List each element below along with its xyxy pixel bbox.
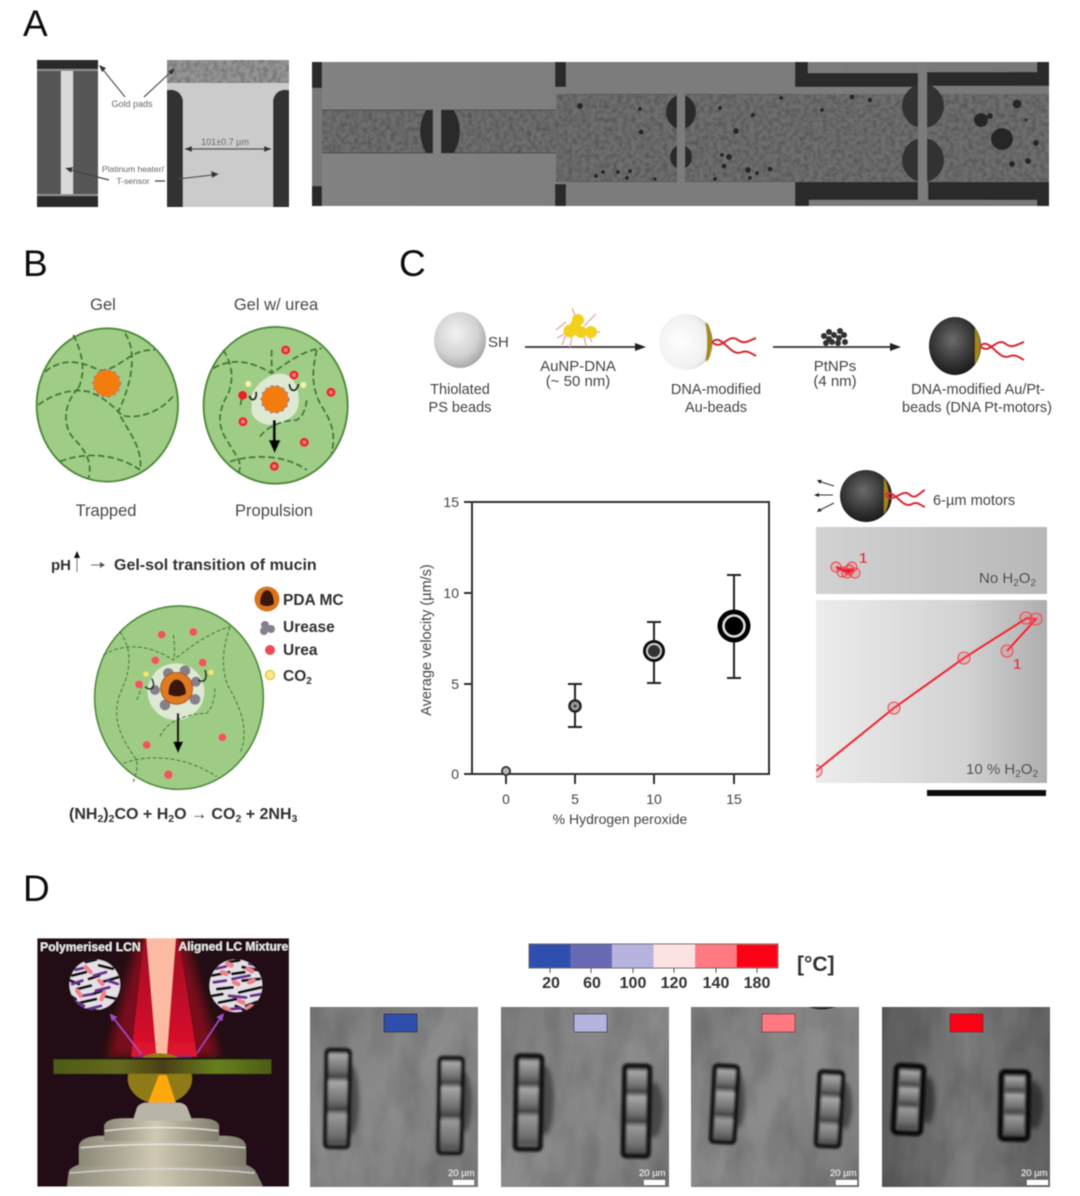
trajectory panel: 10 percent H2O2: O [1021,761,1032,778]
reaction equation: 2 [235,813,241,825]
legend icon: urease [260,621,275,635]
x axis tick labels: 10 [646,791,662,807]
data point: 10 percent [643,622,665,683]
label: 6-µm motors: 6-µm motors [933,493,1015,509]
label: Trapped: Trapped [76,502,136,520]
trajectory panel: no H2O2: No H [979,570,1013,587]
legend: PDA motor components [254,586,344,687]
micrograph: heater close-up [167,60,289,207]
trajectory panel: 10 percent H2O2: 1 [1013,656,1021,673]
legend label: PDA MC: PDA MC [283,592,344,609]
gel diagram: propulsion [204,327,348,484]
gel diagram: trapped [37,328,178,482]
micrograph: 140 °C [691,1007,859,1187]
illustration: laser writing setup [37,938,289,1186]
label: Gel: Gel [90,296,116,314]
micrograph: 100 °C: 20 µm [639,1168,666,1179]
heading: gel-sol transition: Gel-sol transition of mucin [114,557,317,574]
x axis tick labels [502,791,742,807]
arrow: AuNP-DNA step: AuNP-DNA [540,358,616,375]
arrow: PtNPs step [773,328,901,390]
molecule inset: aligned LC mixture [210,959,262,1012]
y axis tick labels: 15 [443,494,459,510]
trajectory panel: 10 percent H2O2 [810,600,1047,783]
y axis tick labels: 0 [451,766,459,782]
y axis title: Average velocity (µm/s) [419,564,435,716]
trajectory panel: 10 percent H2O2: 10 % H [966,761,1015,778]
panel A: microheater micrographs [23,3,1049,207]
y axis tick labels [443,494,459,782]
micrograph: 20 °C: 20 µm [448,1168,475,1179]
bead: DNA Pt-motor [929,317,1024,375]
x axis title: % Hydrogen peroxide [553,811,688,827]
annotation: width measurement: 101±0.7 µm [201,137,249,147]
panel letter B: B [23,243,48,284]
bead: thiolated PS [434,312,486,368]
label: SH: SH [488,334,509,351]
label: DNA-modified Au/Pt-beads [902,382,1052,416]
reaction equation: 2 [97,813,103,825]
arrow: AuNP-DNA step [525,308,646,390]
micrograph: 100 °C [501,1007,669,1187]
temperature colour scale: 60 [583,975,601,992]
temperature colour scale [529,944,835,992]
temperature colour scale: [°C] [797,953,835,976]
label: DNA-modified Au-beads: Au-beads [685,400,747,416]
annotation: platinum heater and T-sensor: Platinum heater/ [102,164,165,174]
panel letter D: D [23,868,50,909]
panel letter A: A [23,3,48,44]
label: DNA-modified Au-beads: DNA-modified [671,382,761,398]
micrograph: 180 °C [882,1007,1050,1187]
trajectory panel: no H2O2: 2 [1013,578,1019,589]
data point: 5 percent [568,684,582,727]
temperature colour scale: 120 [661,975,687,992]
label: DNA-modified Au/Pt-beads: DNA-modified Au/Pt- [911,382,1045,398]
panel letter C: C [399,243,426,284]
reaction equation: 2 [109,813,115,825]
legend icon: CO2 [266,670,274,680]
legend label: urea: Urea [283,642,318,659]
trajectory panel: 10 percent H2O2: 2 [1015,769,1021,780]
annotation: platinum heater and T-sensor [65,164,219,186]
label: Thiolated PS beads [429,382,491,416]
label: DNA-modified Au-beads [671,382,761,416]
annotation: width measurement [184,137,272,152]
reaction equation: ) [103,806,109,823]
trajectory panel: no H2O2: O [1019,570,1030,587]
panel C: DNA Pt-motors [399,243,1052,827]
temperature colour scale: 100 [620,975,646,992]
label: Thiolated PS beads: PS beads [429,400,491,416]
reaction equation: + 2NH [241,806,292,823]
temperature colour scale: 180 [744,975,770,992]
arrow: PtNPs step: (4 nm) [813,373,857,390]
legend label: CO2: 2 [306,676,312,687]
micrograph: 20 °C [310,1007,478,1187]
bead: DNA-modified Au [659,314,756,370]
label: Polymerised LCN: Polymerised LCN [40,940,141,954]
trajectory panel: no H2O2: 2 [1030,578,1036,589]
reaction equation: 2 [168,813,174,825]
label: Aligned LC Mixture: Aligned LC Mixture [179,939,288,953]
panel B: mucin gel propulsion scheme [23,243,348,825]
micrograph: heater array with bubbles [312,62,1049,206]
temperature colour scale: 140 [703,975,729,992]
legend icon: urea [265,645,275,655]
arrow: PtNPs step: PtNPs [814,358,856,375]
arrow: AuNP-DNA step: (~ 50 nm) [546,373,610,390]
reaction equation: 3 [292,813,298,825]
reaction equation: (NH [69,806,97,823]
annotation: gold pads [99,65,175,109]
chart axes [464,502,769,784]
y axis tick labels: 10 [443,585,459,601]
reaction equation: O → CO [174,806,235,823]
panel D: liquid crystal network actuation [23,868,1050,1187]
trajectory panel: no H2O2 [816,527,1047,594]
legend icon: PDA MC [254,586,280,612]
micrograph: 180 °C: 20 µm [1021,1168,1048,1179]
heading: gel-sol transition [51,551,317,574]
data point: 0 percent [502,767,510,775]
x axis tick labels: 15 [726,791,742,807]
temperature colour scale: 20 [542,975,560,992]
micrograph: platinum heater overview [37,60,98,207]
legend label: urease: Urease [283,619,335,636]
molecule inset: polymerised LCN [69,959,120,1011]
data point: 15 percent [718,575,750,678]
annotation: platinum heater and T-sensor: T-sensor [116,176,150,186]
label: Thiolated PS beads: Thiolated [430,382,490,398]
label: Gel w/ urea: Gel w/ urea [234,296,319,314]
trajectory panel: 10 percent H2O2: 2 [1032,769,1038,780]
scale bar [927,790,1046,796]
trajectory panel: no H2O2: 1 [859,550,867,567]
x axis tick labels: 0 [502,791,510,807]
gel diagram: PDA motor mechanism [95,606,263,789]
scatter chart: average velocity vs hydrogen peroxide [419,494,769,827]
label: Propulsion: Propulsion [235,502,313,520]
reaction equation: CO + H [114,806,168,823]
motor icon with propulsion arrows [814,470,925,522]
micrograph: 140 °C: 20 µm [830,1168,857,1179]
y axis tick labels: 5 [451,676,459,692]
label: DNA-modified Au/Pt-beads: beads (DNA Pt-motors) [902,400,1052,416]
arrows to insets [110,1013,224,1054]
annotation: gold pads: Gold pads [111,99,153,109]
legend label: CO2: CO [283,668,306,685]
heading: gel-sol transition: pH [51,557,71,574]
synthesis scheme [429,308,1052,416]
x axis tick labels: 5 [571,791,579,807]
